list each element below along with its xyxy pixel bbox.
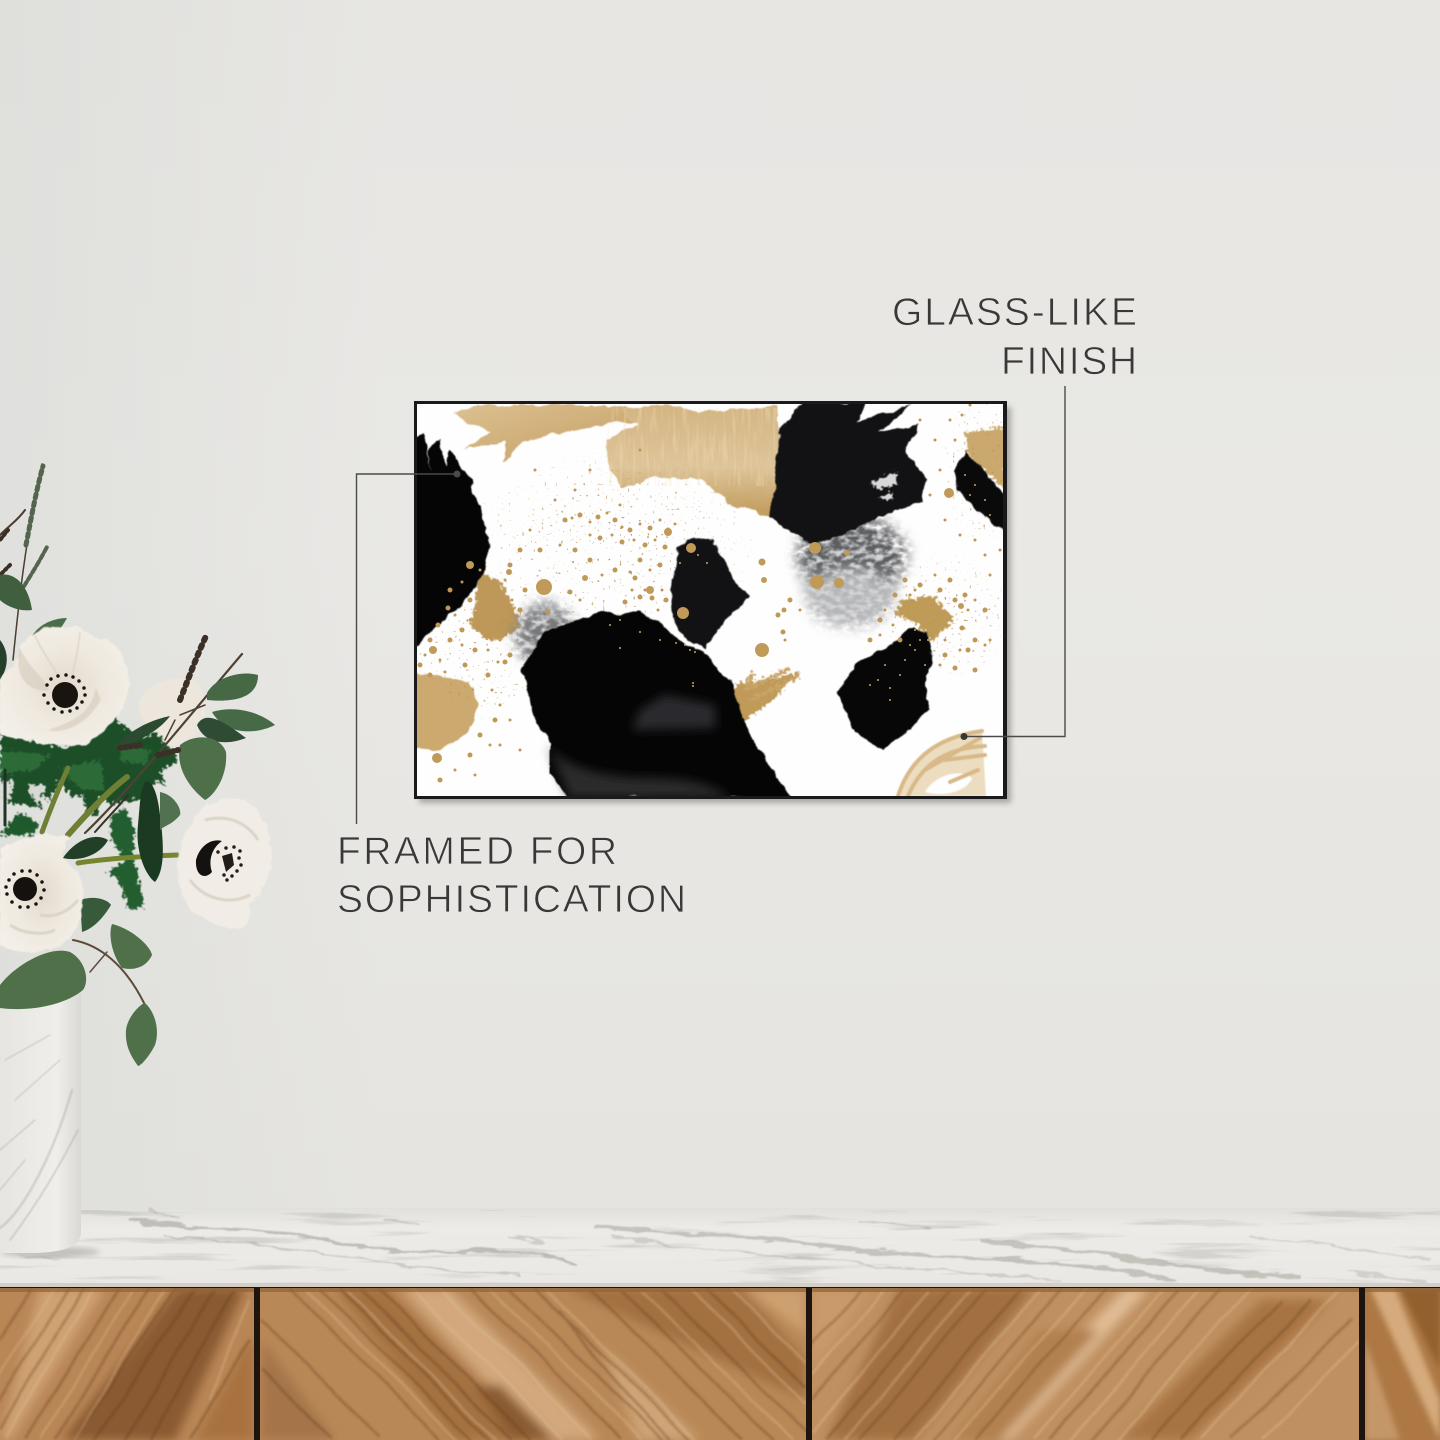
wood door 1	[0, 1288, 254, 1440]
gold swirl: bottom right	[898, 731, 986, 796]
framed painting	[412, 401, 1007, 799]
grey wash inside black brush	[548, 695, 730, 798]
black brush: centre drop	[671, 537, 750, 649]
callout text: framed for sophistication	[337, 830, 686, 921]
gold brush: centre	[734, 666, 802, 722]
top-left leaves	[0, 574, 32, 610]
marble vase	[0, 990, 81, 1253]
gold leaf texture	[607, 408, 779, 486]
wood door 3	[812, 1288, 1359, 1440]
gold splash: left	[470, 572, 522, 640]
dried buds	[120, 634, 207, 755]
callout text: framed for sophistication: FRAMED FOR	[337, 830, 617, 873]
gold splash: right	[894, 596, 955, 642]
sideboard: wood doors	[0, 1287, 1440, 1440]
white canvas	[417, 404, 1003, 796]
callout leader: glass-like finish	[960, 386, 1065, 740]
fine speckle layer	[417, 404, 1003, 721]
flower arrangement	[0, 464, 275, 1066]
black brush: far right	[953, 453, 1006, 532]
green leaves	[207, 674, 258, 701]
gold leaf: top brush stroke	[455, 406, 660, 463]
framed painting drop shadow	[419, 407, 1011, 803]
black brush: lower right drop	[837, 627, 932, 750]
wood door 4	[1365, 1288, 1440, 1440]
wood door 2	[260, 1288, 806, 1440]
white flower: lower left	[0, 836, 84, 952]
vase shadow on marble	[0, 1247, 100, 1257]
callout leader: framed	[356, 470, 460, 824]
white flower: right	[177, 798, 272, 929]
fern foliage	[0, 717, 178, 910]
callout text: glass-like finish: GLASS-LIKE	[892, 291, 1137, 334]
gold dots	[429, 488, 964, 763]
black frame	[414, 401, 1007, 799]
callout text: framed for sophistication: SOPHISTICATION	[337, 878, 686, 921]
gold splatter drops	[420, 405, 1000, 780]
white texture in top right brush	[872, 472, 898, 500]
budding white flower	[139, 678, 206, 746]
black brush: far left	[412, 433, 489, 650]
sideboard: marble top	[0, 1208, 1440, 1288]
black brush: large lower	[522, 613, 790, 798]
sprigs and branches	[0, 464, 48, 660]
gold leaf: top centre block	[605, 404, 779, 518]
callout text: glass-like finish	[892, 291, 1137, 383]
white flower: upper left	[0, 626, 129, 745]
dark leaf	[137, 781, 163, 882]
grey wash smoke	[515, 515, 907, 667]
gold leaf: left block	[412, 673, 480, 750]
gold leaf: top right	[965, 426, 1005, 490]
callout text: glass-like finish: FINISH	[1001, 340, 1137, 383]
black brush: top right	[768, 402, 926, 545]
stems	[5, 654, 242, 1003]
